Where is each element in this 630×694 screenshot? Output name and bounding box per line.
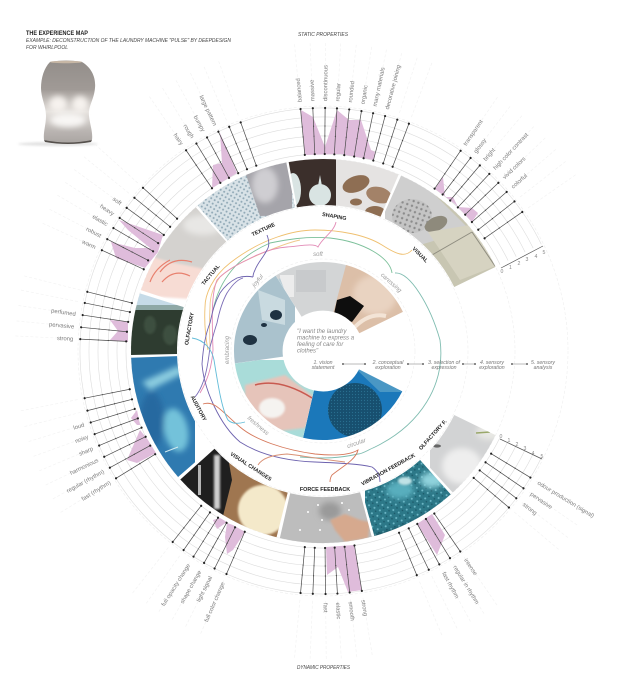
sense label: olfactory: OLFACTORY (184, 312, 196, 346)
axis group: olfactory feedback: odour production (signal) (536, 481, 595, 520)
step 2: exploration (375, 365, 401, 371)
axis group: shaping: organic (361, 85, 370, 105)
faint guide rings (78, 106, 568, 596)
scale axis: lower: 3 (524, 446, 527, 452)
scale axis: lower: 5 (541, 454, 544, 460)
step 4: exploration (479, 365, 505, 371)
sense label: shaping: SHAPING (322, 212, 347, 222)
quality label: joyful: joyful (251, 274, 265, 289)
quality label: circular: circular (347, 438, 368, 450)
sense label: auditory: AUDITORY (189, 395, 207, 423)
axis group: texture: bumpy (192, 115, 205, 133)
axis group: visual: high color contrast (493, 132, 530, 171)
title block: THE EXPERIENCE MAP (26, 30, 88, 37)
axis group: tactual: robust (85, 227, 102, 240)
axis group: auditory: harmonious (69, 458, 100, 477)
sense label: visual: VISUAL (411, 246, 429, 265)
scale axis: lower: 2 (516, 442, 519, 448)
photo: vibration feedback (365, 460, 451, 536)
axis group: auditory: loud (73, 423, 85, 432)
heading: dynamic properties: DYNAMIC PROPERTIES (297, 665, 350, 671)
axis group: visual changes: light signal (196, 576, 214, 603)
axis group: texture: large pattern (198, 95, 217, 127)
axis group: tactual: soft (111, 196, 122, 207)
vision statement quote: machine to express a (297, 336, 355, 342)
axis group: tactual (42, 143, 179, 271)
rating areas: pink profile shapes (110, 110, 478, 592)
scale axis: upper: 2 (518, 261, 521, 267)
curve: visual to embracing (orange) (205, 230, 412, 350)
axis group: visual: vivid colors (502, 156, 527, 181)
axis group: visual: bright (483, 147, 497, 163)
scale axis: upper: 5 (543, 250, 546, 256)
curve: olfactory to freshness (blue) (192, 338, 245, 423)
axis group: texture: hairy (172, 133, 184, 147)
curve: joyful to auditory second strand (purple) (195, 278, 243, 397)
scale axis: lower (500, 434, 544, 460)
axis group: auditory: sharp (78, 446, 95, 458)
title block (26, 30, 232, 51)
curve: caressing to tactual (green) (213, 237, 392, 310)
curve: second orange strand (210, 240, 300, 350)
axis group: force feedback: elastic (334, 602, 341, 620)
axis group: force feedback: smooth (347, 601, 355, 621)
step 2: 2. conceptual (372, 360, 404, 366)
axis group: force feedback (293, 544, 373, 659)
photo: texture (198, 162, 295, 240)
scale axis: lower: 0 (500, 434, 503, 440)
step 3: 3. selection of (428, 360, 461, 366)
axis group: auditory: fast (rhythm) (81, 480, 112, 503)
axis group: shaping: massive (310, 79, 317, 101)
sense label: olfactory feedback: OLFACTORY F. (418, 419, 449, 452)
step 3: expression (431, 365, 457, 371)
axis group: tactual: elastic (91, 214, 108, 228)
axis group: visual: glossy (473, 138, 488, 155)
axis group: shaping: rounded (348, 81, 356, 103)
step 1: 1. vision (313, 360, 333, 366)
curve: visual changes to circular (258, 454, 345, 465)
title block: FOR WHIRLPOOL (26, 45, 68, 51)
axis group: auditory (21, 388, 157, 513)
axis group: olfactory: pervasive (49, 322, 75, 331)
axis group: visual changes (132, 504, 246, 634)
photo: olfactory (131, 294, 184, 355)
scale axis: upper: 0 (501, 269, 504, 275)
axis group: shaping: regular (335, 83, 342, 102)
axis group: visual: transparent (463, 119, 485, 147)
sense label: visual changes: VISUAL CHANGES (229, 452, 273, 483)
axis group: olfactory: perfumed (51, 308, 76, 318)
scale axis: lower: 1 (508, 438, 511, 444)
axis group: tactual: warm (80, 239, 96, 251)
axis group: visual: colorful (511, 173, 529, 190)
axis group: visual (433, 97, 576, 240)
axis group: olfactory: strong (57, 336, 73, 343)
photo: olfactory feedback (430, 415, 496, 492)
axis group: shaping: discontinuous (323, 65, 329, 101)
axis group: force feedback: fast (322, 603, 328, 613)
scale axis: upper: 4 (535, 254, 538, 260)
step arrows (342, 363, 528, 365)
axis group: auditory: noisy (74, 435, 89, 445)
vision statement quote: feeling of care for (297, 342, 344, 348)
axis group: texture: rough (181, 124, 194, 140)
photo: tactual (141, 208, 226, 300)
product image: pulse laundry machine (18, 60, 98, 146)
photo: visual changes (180, 448, 288, 538)
sense label: tactual: TACTUAL (201, 263, 222, 287)
axis group: tactual: heavy (98, 204, 115, 217)
photo: force feedback (280, 492, 372, 544)
axis group: vibration feedback: regular in rhythm (451, 565, 480, 606)
axis group: visual changes: full color change (204, 581, 227, 623)
axis group: shaping: decorative joining (385, 64, 402, 110)
curve: joyful to auditory and force feedback (purple) (202, 276, 380, 482)
curve: auditory to circular (red) (203, 403, 358, 482)
axis group: texture (149, 61, 258, 190)
vision statement quote: "I want the laundry (297, 329, 347, 335)
axis group: shaping (293, 43, 433, 168)
quality label: soft: soft (313, 252, 323, 258)
axis group: vibration feedback: intense (462, 558, 478, 577)
axis group: visual changes: shape change (180, 569, 204, 605)
axis group: vibration feedback: fast rhythm (440, 571, 459, 600)
curve: texture to joyful (purple) (253, 235, 269, 277)
curve: shaping to soft (pink) (200, 222, 336, 393)
inner photo: blue-grey ink (234, 276, 295, 364)
quality label: freshness: freshness (246, 416, 270, 437)
step 4: 4. sensory (480, 360, 504, 366)
quality label: caressing: caressing (379, 272, 403, 295)
title block: EXAMPLE: DECONSTRUCTION OF THE LAUNDRY MACHINE "PULSE" BY DEEPDESIGN (26, 38, 232, 44)
quality label: embracing: embracing (225, 335, 231, 364)
axis group: force feedback: strong (359, 599, 368, 617)
axis group: visual changes: full opacity change (161, 563, 192, 608)
sense label: force feedback: FORCE FEEDBACK (300, 487, 350, 493)
photo: shaping (288, 159, 398, 217)
sense label: vibration feedback: VIBRATION FEEDBACK (361, 453, 417, 487)
step 1: statement (312, 365, 335, 371)
photo: visual (385, 176, 496, 287)
inner photo: grey panels (276, 262, 348, 317)
axis group: shaping: many materials (373, 67, 387, 107)
axis group: olfactory feedback: pervasive (529, 492, 553, 511)
heading: static properties: STATIC PROPERTIES (298, 32, 348, 38)
inner photo: hand and black object (334, 265, 403, 334)
scale axis: lower: 4 (532, 451, 535, 457)
axis group: olfactory feedback (472, 452, 595, 550)
axis group: vibration feedback (398, 512, 498, 636)
axis group: olfactory feedback: strong (521, 502, 538, 517)
sense label: texture: TEXTURE (251, 222, 277, 238)
scale axis: upper: 3 (526, 257, 529, 263)
process steps (312, 360, 555, 371)
inner photo: blue textured sphere (303, 369, 402, 440)
axis group: olfactory (15, 275, 133, 343)
axis group: shaping: balanced (296, 78, 304, 102)
axis group: auditory: regular (rhythm) (66, 469, 106, 495)
scale axis: upper (501, 246, 546, 275)
photo: auditory (131, 356, 195, 477)
inner photo: hands with foam (234, 360, 314, 438)
vision statement quote: clothes" (297, 348, 319, 354)
step 5: 5. sensory (531, 360, 555, 366)
scale axis: upper: 1 (509, 265, 512, 271)
curve: caressing to circular (teal) (300, 273, 441, 458)
connection curves between senses and qualities (192, 222, 441, 482)
step 5: analysis (534, 365, 553, 371)
